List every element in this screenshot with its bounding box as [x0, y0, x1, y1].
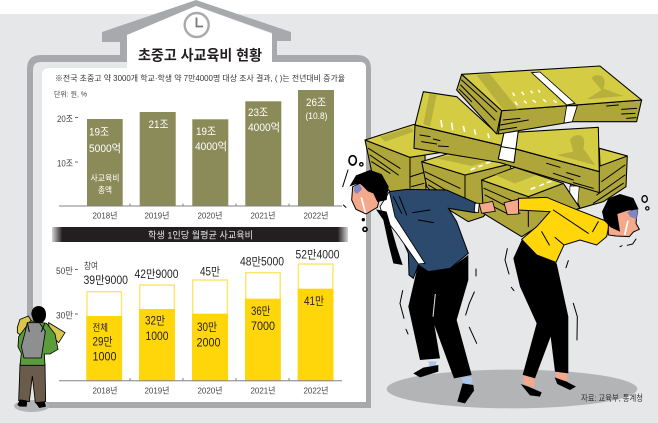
value labels above bars: 45만 [200, 266, 220, 279]
value labels inside bars: 2000 [196, 338, 220, 350]
money stack: left lower [365, 124, 447, 194]
year labels: 2022년 [304, 210, 328, 220]
illustration: money stacks [365, 66, 642, 237]
bar value labels: 23조 [248, 107, 268, 119]
value labels inside bars: 1000 [146, 331, 168, 343]
bar value labels: 19조 [89, 126, 109, 138]
year labels: 2019년 [144, 210, 170, 220]
bar value labels: (10.8) [306, 111, 328, 122]
value labels inside bars: 32만 [145, 315, 165, 328]
bars [87, 90, 334, 206]
year labels: 2021년 [250, 386, 276, 396]
y axis labels: 50만 [56, 266, 73, 276]
y axis labels: 20조 [57, 114, 73, 124]
survey note: ※전국 초중고 약 3000개 학교·학생 약 7만4000명 대상 조사 결과, ( )는 전년대비 증가율 [55, 73, 345, 83]
y axis labels: 10조 [57, 158, 73, 168]
woman fist [504, 199, 519, 215]
man shirt and tie [376, 192, 425, 265]
value labels inside bars [92, 295, 324, 364]
woman jacket [518, 197, 609, 262]
year labels [92, 386, 328, 396]
year labels: 2020년 [198, 210, 222, 220]
bar chart: monthly spending per student [56, 248, 342, 396]
money stack: top [457, 66, 642, 134]
bar value labels: 총액 [98, 185, 112, 195]
illustration: student with backpack [14, 306, 65, 412]
value labels inside bars: 전체 [92, 323, 108, 334]
panel: house-shaped frame [0, 0, 371, 423]
year labels [92, 210, 328, 220]
value labels inside bars: 1000 [92, 352, 116, 364]
value labels above bars: 39만9000 [84, 274, 128, 287]
illustration: man carrying money [376, 189, 637, 408]
illustration: woman's head [602, 194, 649, 247]
shadow [387, 370, 637, 408]
illustration: woman carrying money [504, 197, 609, 397]
year labels: 2020년 [198, 386, 222, 396]
value labels inside bars: 41만 [304, 295, 324, 308]
year labels: 2018년 [92, 210, 118, 220]
title: 초중고 사교육비 현황 [138, 48, 262, 64]
woman shoes [521, 372, 576, 397]
money stack: centre lower [422, 153, 513, 222]
year labels: 2022년 [304, 386, 328, 396]
source credit: 자료: 교육부, 통계청 [581, 393, 643, 403]
man trousers [408, 255, 472, 378]
value labels above bars [84, 248, 340, 287]
money stack: tilted middle [414, 92, 599, 193]
bar chart: total private education spending [57, 90, 342, 220]
value labels above bars: 42만9000 [134, 268, 178, 281]
illustration: man's head [343, 156, 389, 231]
bar value labels: 4000억 [248, 121, 280, 134]
icon: clock [185, 13, 209, 37]
year labels: 2018년 [92, 386, 118, 396]
value labels inside bars: 7000 [251, 321, 275, 333]
motion lines [400, 249, 577, 343]
bar value labels: 사교육비 [90, 173, 120, 183]
y axis labels [57, 114, 78, 168]
man jacket [389, 189, 477, 278]
value labels inside bars: 30만 [197, 321, 217, 334]
unit note: 단위: 원, % [54, 90, 87, 98]
x axis [59, 378, 342, 381]
year labels: 2019년 [144, 386, 170, 396]
bar value labels: 26조 [306, 97, 326, 109]
section band: monthly average per student: 학생 1인당 월평균 사교육비 [148, 230, 253, 242]
bar value labels: 19조 [196, 126, 216, 138]
participating student bars (outline) [87, 264, 333, 381]
y axis labels [56, 266, 78, 320]
section band: monthly average per student [52, 227, 348, 242]
bar value labels: 5000억 [89, 142, 121, 155]
x axis [59, 204, 342, 206]
money stack: centre front [482, 167, 580, 237]
y axis labels: 30만 [56, 310, 73, 320]
man fist [474, 201, 495, 213]
woman trousers [513, 240, 568, 378]
value labels above bars: 참여 [84, 260, 98, 271]
bar value labels: 4000억 [195, 140, 227, 153]
all student bars (fill) [86, 289, 333, 381]
man shoes [413, 361, 474, 403]
bar value labels [89, 97, 328, 195]
value labels above bars: 48만5000 [240, 256, 284, 269]
value labels inside bars: 29만 [92, 336, 113, 349]
money stack: right rear [569, 148, 627, 208]
value labels above bars: 52만4000 [296, 248, 340, 261]
value labels inside bars: 36만 [251, 305, 271, 318]
bar value labels: 21조 [148, 119, 168, 131]
year labels: 2021년 [250, 210, 276, 220]
